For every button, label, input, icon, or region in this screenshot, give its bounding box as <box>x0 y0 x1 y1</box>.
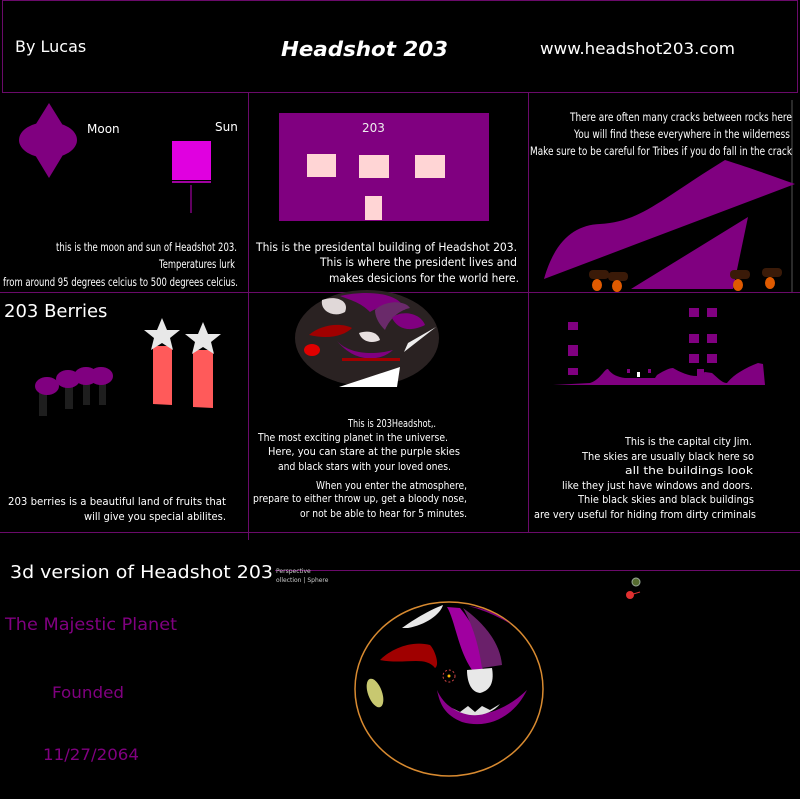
icon: star fruits <box>144 318 221 408</box>
3d sphere <box>355 602 543 776</box>
text: moon and sun description: Temperatures lurk <box>158 257 235 271</box>
text: city description: The skies are usually black here so <box>581 451 754 463</box>
text: berries description: will give you special abilites. <box>84 511 226 523</box>
text: planet description: prepare to either throw up, get a bloody nose, <box>253 493 467 505</box>
icon: building <box>279 113 489 221</box>
icons: tribes <box>589 268 782 292</box>
text: city description: Thie black skies and black buildings <box>577 494 754 506</box>
text: date: 11/27/2064 <box>43 745 139 764</box>
text: city description: This is the capital city Jim. <box>624 436 752 448</box>
header: author: By Lucas <box>15 37 86 56</box>
icon: moon <box>19 103 77 178</box>
text: building description <box>255 240 519 285</box>
text: ollection | Sphere <box>276 577 329 584</box>
text: berries description <box>8 496 226 523</box>
text: berries description: 203 berries is a beautiful land of fruits that <box>8 496 226 508</box>
text: moon and sun description: from around 95 degrees celcius to 500 degrees celcius. <box>3 275 238 289</box>
icon: building: 203 <box>362 121 385 135</box>
panel: planet face <box>253 290 467 520</box>
panel: 203 berries <box>4 301 226 523</box>
text: building description: makes desicions for the world here. <box>329 271 519 285</box>
header: website: www.headshot203.com <box>540 39 735 58</box>
panel: capital city Jim <box>534 308 765 521</box>
text: planet description: When you enter the atmosphere, <box>316 480 467 492</box>
illustration: rocks <box>544 160 795 279</box>
header: title: Headshot 203 <box>281 37 448 61</box>
text: building description: This is the presidental building of Headshot 203. <box>255 240 517 254</box>
text: Perspective <box>276 568 311 575</box>
icons: small markers <box>626 578 640 599</box>
panel: moon and sun: Moon <box>87 122 120 136</box>
panel: moon and sun <box>3 103 238 289</box>
text: city description: like they just have windows and doors. <box>562 480 753 492</box>
text: planet description: and black stars with your loved ones. <box>278 461 451 473</box>
panel: moon and sun: Sun <box>215 120 238 134</box>
panel: presidential building <box>255 113 519 285</box>
illustration: planet <box>295 290 439 387</box>
text: city description: all the buildings look <box>625 465 754 477</box>
text: planet description: Here, you can stare at the purple skies <box>268 446 460 458</box>
icon: sun <box>172 141 211 213</box>
text: planet description: The most exciting planet in the universe. <box>257 432 448 444</box>
text: majestic planet: The Majestic Planet <box>4 615 177 635</box>
panel: 203 berries: 203 Berries <box>4 301 107 322</box>
icon: purple berries <box>35 367 113 416</box>
text: planet description: This is 203Headshot,. <box>347 418 436 430</box>
text: founded: Founded <box>52 683 124 702</box>
heading: 3d version: 3d version of Headshot 203 <box>10 562 273 583</box>
text: city description <box>534 436 756 521</box>
text: planet description: or not be able to hear for 5 minutes. <box>300 508 467 520</box>
text: building description: This is where the president lives and <box>319 255 517 269</box>
text: moon and sun description: this is the moon and sun of Headshot 203. <box>56 240 237 254</box>
text: moon and sun description <box>3 240 238 289</box>
panel: cracks <box>530 110 795 292</box>
illustration: city <box>553 308 765 385</box>
text: cracks description <box>530 110 792 158</box>
text: planet description <box>253 418 467 520</box>
text: city description: are very useful for hiding from dirty criminals <box>534 509 756 521</box>
